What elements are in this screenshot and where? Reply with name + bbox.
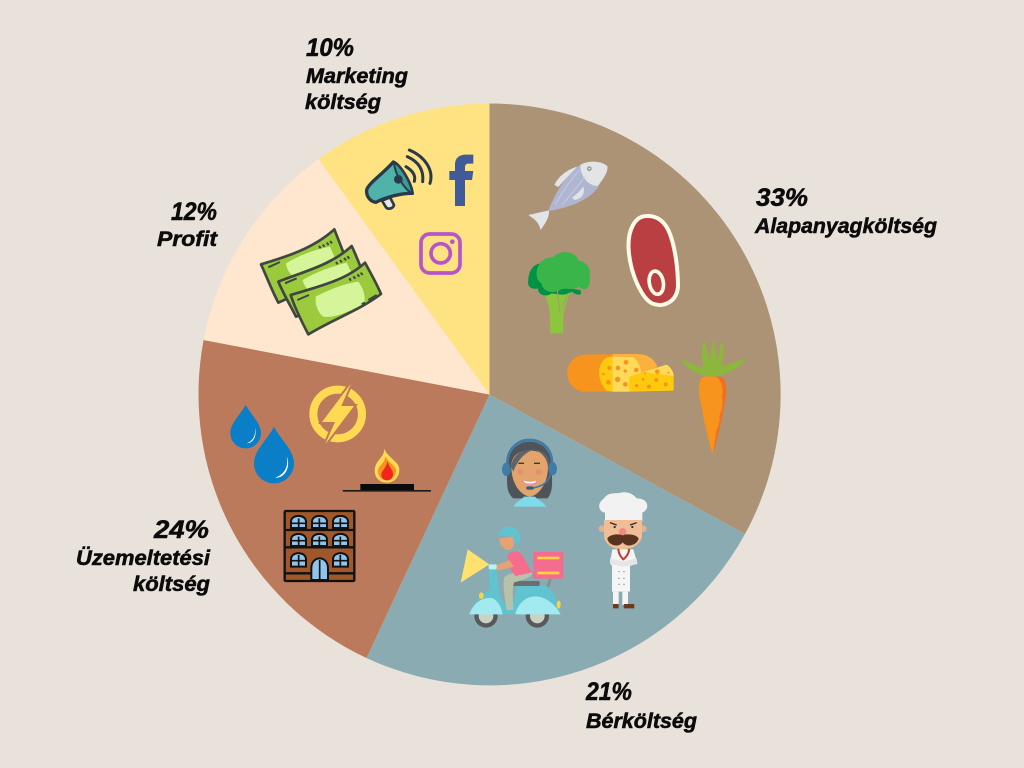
icon: cheese <box>567 354 674 392</box>
icon: call-centre agent <box>502 440 557 507</box>
label: marketing 10%: költség <box>305 91 381 114</box>
label: wages 21%: 21% <box>585 678 632 706</box>
label: profit 12% <box>157 198 218 251</box>
label: wages 21% <box>585 678 697 733</box>
label: raw materials 33%: Alapanyagköltség <box>754 215 937 238</box>
icon: broccoli <box>528 252 590 333</box>
label: profit 12%: Profit <box>157 228 218 251</box>
icon: chef <box>599 492 647 608</box>
slice: wages 21% <box>366 394 745 685</box>
label: marketing 10%: Marketing <box>306 65 408 88</box>
slice: profit 12% <box>204 159 490 394</box>
label: raw materials 33% <box>754 184 937 238</box>
slice: marketing 10% <box>318 103 490 394</box>
icon: fish <box>528 162 608 230</box>
slice: operating 24% <box>198 340 490 658</box>
icon: facebook logo <box>449 155 473 206</box>
slice: raw materials 33% <box>490 103 781 534</box>
pie chart <box>198 103 781 685</box>
label: marketing 10%: 10% <box>306 34 354 62</box>
icon: water drops <box>230 405 294 483</box>
icon: building <box>285 511 354 581</box>
icon: gas flame <box>343 448 431 492</box>
label: operating 24% <box>76 516 211 596</box>
icon: banknotes <box>261 229 381 334</box>
icon: carrot <box>680 338 747 454</box>
label: operating 24%: Üzemeltetési <box>76 547 211 570</box>
icon: instagram logo <box>421 234 460 273</box>
icon: delivery scooter <box>461 527 563 628</box>
label: wages 21%: Bérköltség <box>586 710 697 733</box>
icon: megaphone <box>367 150 431 209</box>
label: operating 24%: költség <box>133 573 210 596</box>
label: profit 12%: 12% <box>171 198 217 226</box>
label: raw materials 33%: 33% <box>756 184 808 212</box>
label: marketing 10% <box>305 34 408 114</box>
label: operating 24%: 24% <box>153 516 209 544</box>
icon: steak <box>629 216 678 305</box>
icon: lightning ring <box>313 384 362 444</box>
